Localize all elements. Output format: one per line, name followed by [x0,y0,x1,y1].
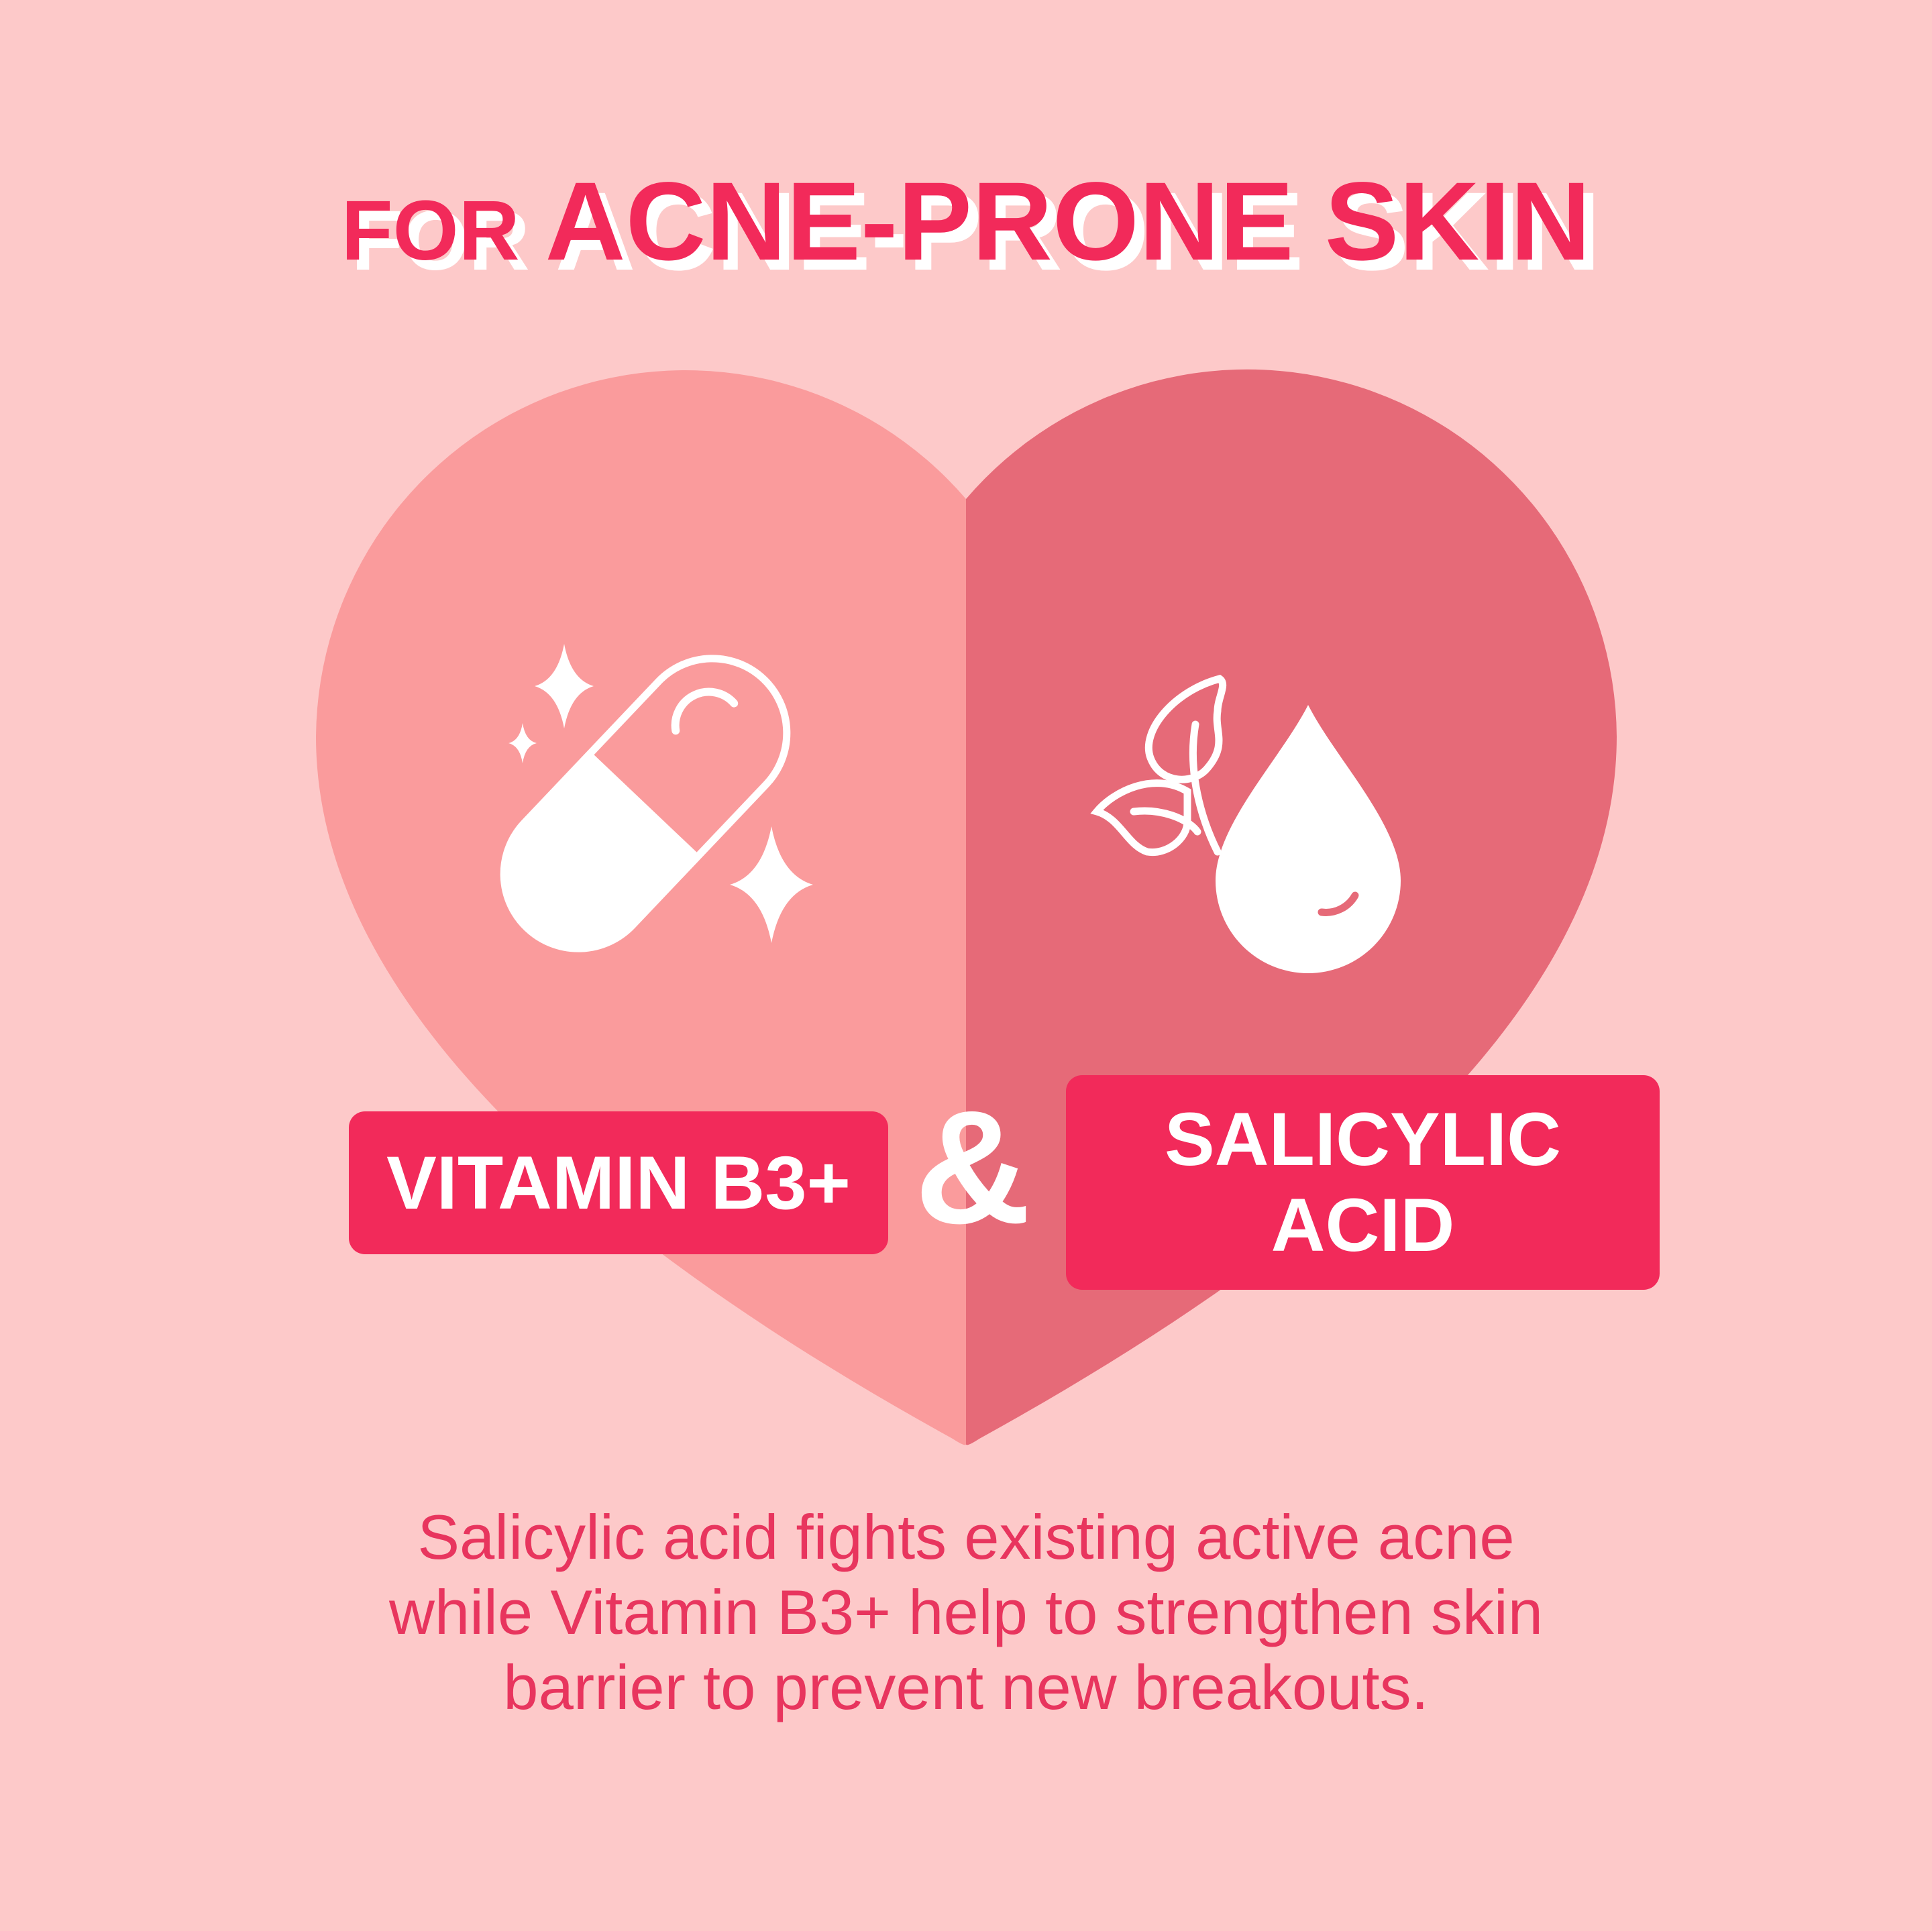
heart right half [966,370,1617,1445]
icon: pill with sparkles [468,625,820,984]
label: vitamin B3+: VITAMIN B3+ [386,1141,851,1225]
title: FORACNE-PRONE SKIN [341,160,1591,284]
description text [389,1502,1543,1722]
title: FORACNE-PRONE SKIN [352,170,1601,294]
ampersand: & [914,1077,1031,1257]
label: salicylic acid: SALICYLIC [1165,1097,1561,1181]
label: vitamin B3+ [349,1111,888,1254]
heart left half [316,370,966,1445]
description text: Salicylic acid fights existing active acne [417,1502,1515,1572]
description text: while Vitamin B3+ help to strengthen skin [389,1577,1543,1647]
label: salicylic acid: ACID [1271,1183,1454,1267]
label: salicylic acid [1066,1075,1660,1290]
description text: barrier to prevent new breakouts. [503,1652,1429,1722]
icon: drop with leaves [1097,679,1401,973]
